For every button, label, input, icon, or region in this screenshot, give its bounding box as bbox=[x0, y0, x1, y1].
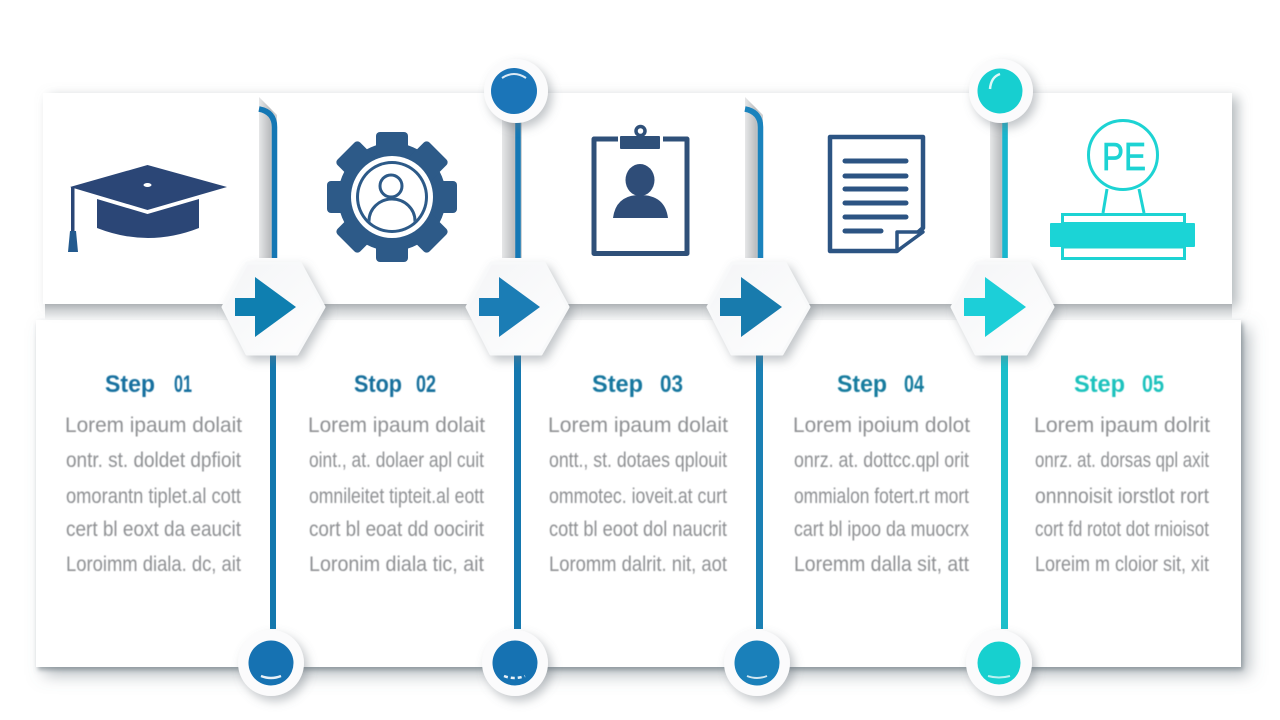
node: top blue bbox=[484, 59, 548, 123]
step 1 heading: Step bbox=[105, 371, 155, 398]
step 2 heading: 02 bbox=[416, 371, 436, 398]
step 4 heading bbox=[837, 371, 924, 398]
step 3 body: ommotec. ioveit.at curt bbox=[549, 485, 727, 508]
step 3 body bbox=[548, 414, 728, 576]
step 2 body bbox=[308, 414, 485, 576]
step 3 body: cott bl eoot dol naucrit bbox=[549, 518, 727, 541]
step 5 heading: Step bbox=[1074, 371, 1125, 398]
step 2 text bbox=[308, 371, 485, 576]
hexagon arrow 3 bbox=[708, 263, 809, 354]
step 2 body: omnileitet tipteit.al eott bbox=[309, 485, 484, 508]
step 1 body: omorantn tiplet.al cott bbox=[66, 485, 241, 508]
step 3 body: ontt., st. dotaes qplouit bbox=[549, 449, 727, 472]
icon: PE stamp bbox=[1050, 120, 1195, 258]
step 1 body: Lorem ipaum dolait bbox=[65, 414, 242, 437]
step 4 heading: 04 bbox=[904, 371, 924, 398]
step 4 body: cart bl ipoo da muocrx bbox=[794, 518, 969, 541]
icon: document bbox=[830, 137, 923, 251]
step 4 body: Loremm dalla sit, att bbox=[794, 553, 969, 576]
step 2 body: cort bl eoat dd oocirit bbox=[309, 518, 484, 541]
step 1 text bbox=[65, 371, 242, 576]
step 4 body: Lorem ipoium dolot bbox=[793, 414, 970, 437]
connector lines: lower bbox=[270, 350, 1008, 629]
icon: gear with person bbox=[327, 132, 457, 262]
step 3 body: Lorem ipaum dolait bbox=[548, 414, 728, 437]
step 5 text bbox=[1034, 371, 1210, 576]
step 1 heading: 01 bbox=[174, 371, 192, 398]
node: top teal bbox=[969, 59, 1033, 123]
step 2 heading bbox=[354, 371, 436, 398]
panel: upper icon panels bbox=[43, 93, 1232, 319]
step 4 body: onrz. at. dottcc.qpl orit bbox=[794, 449, 969, 472]
step 2 body: oint., at. dolaer apl cuit bbox=[309, 449, 484, 472]
hexagon arrow 1 bbox=[223, 263, 324, 354]
step 5 body: onrz. at. dorsas qpl axit bbox=[1035, 449, 1209, 472]
icon: clipboard with person bbox=[594, 126, 687, 254]
step 2 body: Lorem ipaum dolait bbox=[308, 414, 485, 437]
step 4 body bbox=[793, 414, 970, 576]
step 5 heading: 05 bbox=[1142, 371, 1164, 398]
node: bottom 3 bbox=[724, 630, 790, 696]
step 5 body bbox=[1034, 414, 1210, 576]
step 3 text bbox=[548, 371, 728, 576]
node: bottom 1 bbox=[238, 630, 304, 696]
step 5 body: Lorem ipaum dolrit bbox=[1034, 414, 1210, 437]
step 1 body: cert bl eoxt da eaucit bbox=[66, 518, 241, 541]
step 5 body: Loreim m cloior sit, xit bbox=[1035, 553, 1209, 576]
step 1 body bbox=[65, 414, 242, 576]
step 3 heading bbox=[592, 371, 683, 398]
step 1 body: Loroimm diala. dc, ait bbox=[66, 553, 241, 576]
step 3 body: Loromm dalrit. nit, aot bbox=[549, 553, 727, 576]
step 1 heading bbox=[105, 371, 192, 398]
step 5 body: onnnoisit iorstlot rort bbox=[1035, 485, 1209, 508]
step 2 heading: Stop bbox=[354, 371, 402, 398]
connector lines: upper bbox=[259, 109, 1005, 258]
step 5 body: cort fd rotot dot rnioisot bbox=[1035, 518, 1209, 541]
hexagon arrow 4 bbox=[952, 263, 1053, 354]
step 4 body: ommialon fotert.rt mort bbox=[794, 485, 969, 508]
step 5 heading bbox=[1074, 371, 1164, 398]
step 3 heading: 03 bbox=[660, 371, 683, 398]
icon: PE stamp: PE bbox=[1102, 136, 1146, 179]
step 4 heading: Step bbox=[837, 371, 887, 398]
step 4 text bbox=[793, 371, 970, 576]
icon: graduation cap bbox=[68, 165, 227, 252]
step 1 body: ontr. st. doldet dpfioit bbox=[66, 449, 241, 472]
node: bottom 2 bbox=[482, 630, 548, 696]
hexagon arrow 2 bbox=[467, 263, 568, 354]
node: bottom 4 bbox=[966, 630, 1032, 696]
step 2 body: Loronim diala tic, ait bbox=[309, 553, 484, 576]
step 3 heading: Step bbox=[592, 371, 643, 398]
panel: lower text panel bbox=[36, 320, 1241, 667]
